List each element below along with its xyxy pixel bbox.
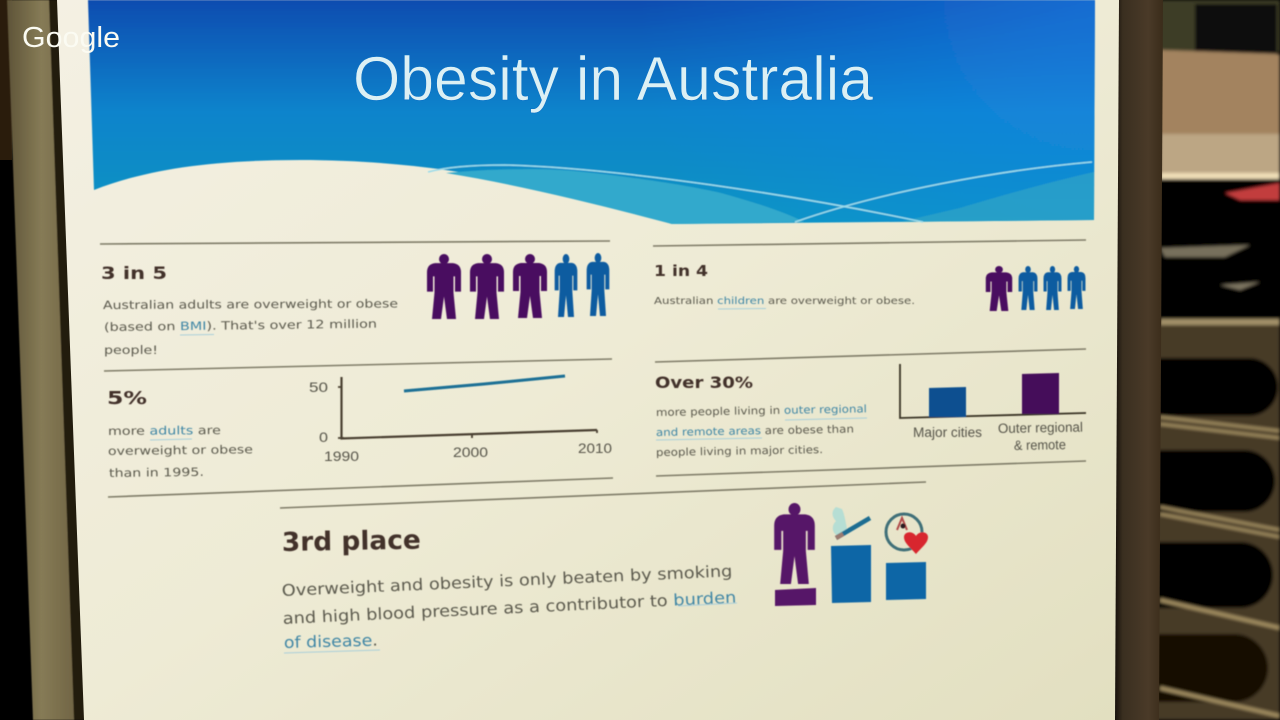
line chart: trend 1990 to 2010 <box>309 376 612 464</box>
text: 3 in 5 description: Australian adults are overweight or obese <box>103 296 398 312</box>
heading: Over 30%: Over 30% <box>655 373 753 392</box>
line chart: trend 1990 to 2010: 0 <box>319 430 328 445</box>
heading: 3rd place: 3rd place <box>282 526 421 558</box>
line chart: trend 1990 to 2010: 1990 <box>324 449 359 464</box>
heading: 5%: 5% <box>107 388 147 409</box>
bar chart: major cities vs outer regional <box>900 364 1086 453</box>
heading: 3 in 5: 3 in 5 <box>101 264 167 284</box>
bar chart: major cities vs outer regional: & remote <box>1014 437 1066 453</box>
panel: 1 in 4 <box>654 262 1085 311</box>
panel: 5% <box>107 376 612 480</box>
line chart: trend 1990 to 2010: 50 <box>309 380 328 395</box>
panel: 3 in 5 <box>101 253 609 357</box>
podium: cigarette on second step <box>831 507 871 603</box>
text: 3rd place description: and high blood pressure as a contributor to burden <box>282 588 737 628</box>
panel: 3rd place <box>281 503 928 653</box>
text: Over 30% description: and remote areas are obese than <box>656 424 854 439</box>
text: Over 30% description <box>656 403 867 459</box>
line chart: trend 1990 to 2010: 2010 <box>578 441 612 456</box>
text: 5% description: overweight or obese <box>108 442 253 458</box>
text: Over 30% description: people living in major cities. <box>656 444 823 459</box>
bar chart: major cities vs outer regional: Major cities <box>913 425 982 440</box>
monitor bezel: left <box>7 0 85 720</box>
title: Obesity in Australia <box>353 45 873 114</box>
text: 3rd place description: of disease . <box>284 631 378 652</box>
Google logo watermark: Google <box>22 22 120 54</box>
podium: person on first step <box>774 503 816 606</box>
text: Over 30% description: more people living in outer regional <box>656 403 867 419</box>
heading: 1 in 4: 1 in 4 <box>654 262 708 280</box>
panel: Over 30% <box>655 364 1086 459</box>
line chart: trend 1990 to 2010: 2000 <box>453 445 488 460</box>
text: 1 in 4 description: Australian children are overweight or obese. <box>654 296 915 307</box>
header banner <box>88 0 1095 224</box>
text: 5% description: than in 1995. <box>109 465 204 480</box>
text: 3rd place description: Overweight and obesity is only beaten by smoking <box>281 561 733 600</box>
text: 5% description <box>108 423 253 480</box>
monitor bezel: right <box>1114 0 1163 720</box>
text: 3 in 5 description: (based on BMI ). That's over 12 million <box>104 317 377 334</box>
podium: blood pressure gauge and heart on third step <box>886 514 928 600</box>
text: 3 in 5 description <box>103 296 398 357</box>
icon: four people, one purple <box>986 266 1085 311</box>
icon: five people, three purple <box>427 253 609 319</box>
text: 3 in 5 description: people! <box>104 343 158 357</box>
text: 3rd place description <box>281 561 737 653</box>
text: 5% description: more adults are <box>108 423 221 438</box>
section dividers <box>100 240 1086 508</box>
bar chart: major cities vs outer regional: Outer regional <box>998 420 1083 436</box>
